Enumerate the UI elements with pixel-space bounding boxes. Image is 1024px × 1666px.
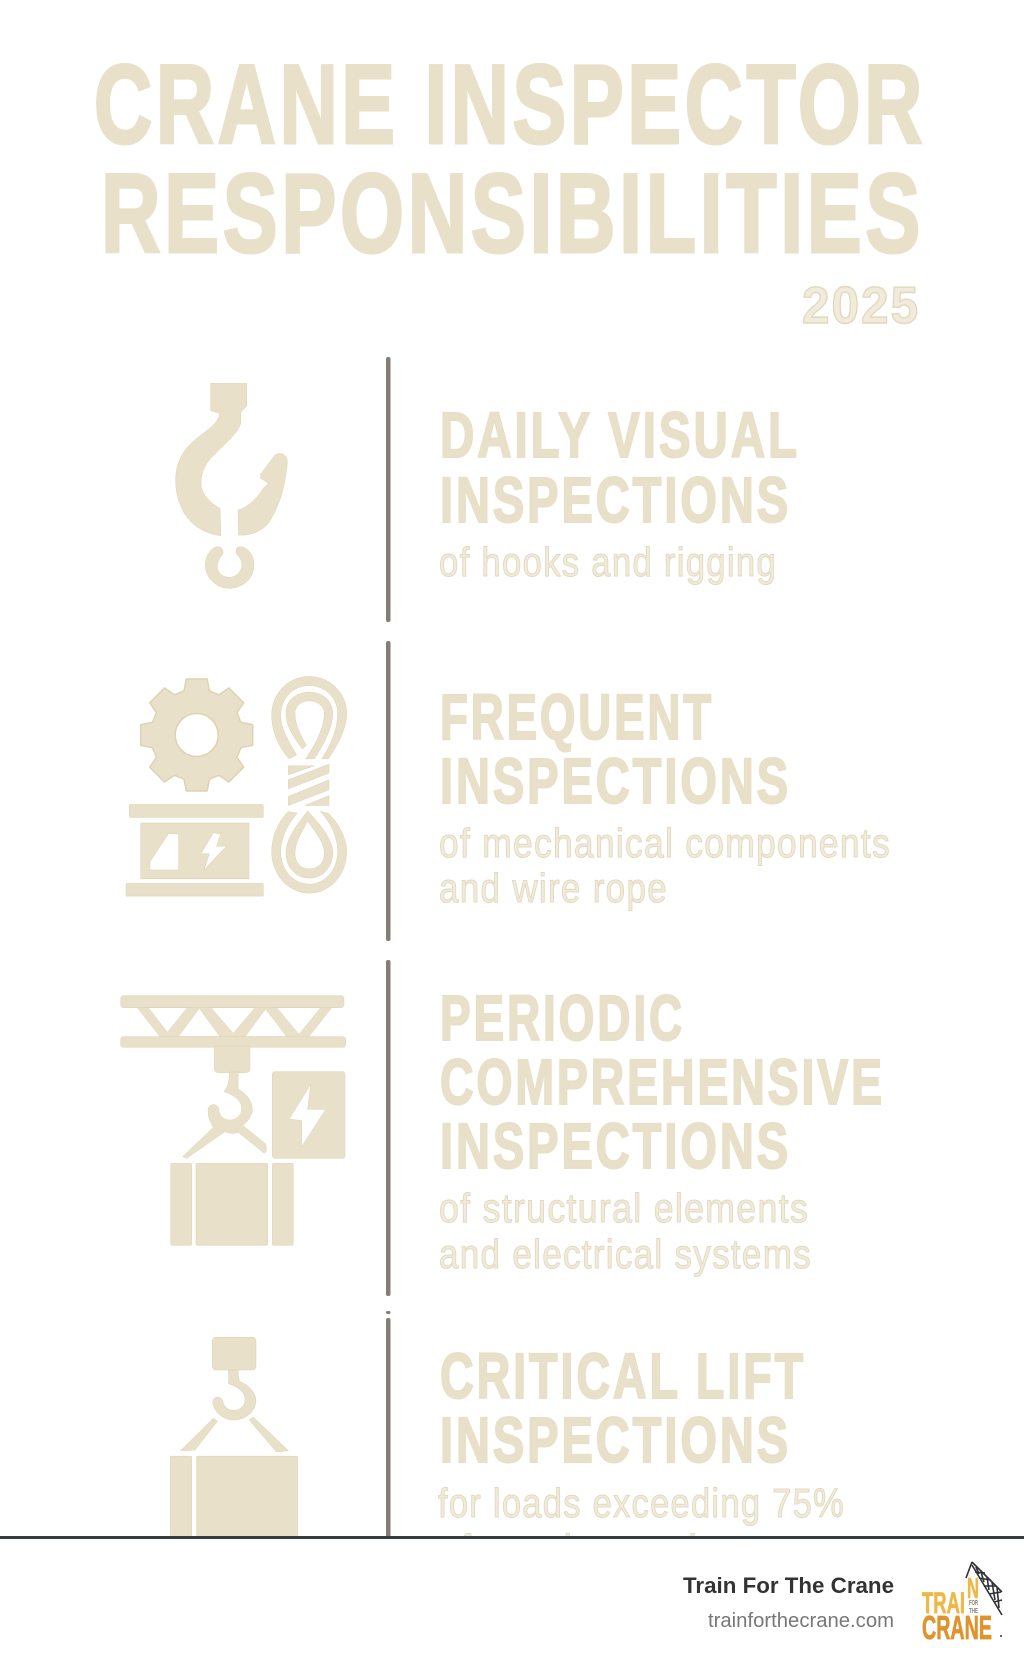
description [438, 1480, 845, 1572]
heading [440, 681, 791, 817]
icon: crane hook [176, 383, 287, 588]
logo wordmark: FOR [969, 1600, 978, 1607]
footer background [0, 1536, 1024, 1666]
divider [386, 1311, 390, 1538]
description [439, 820, 891, 911]
heading: DAILY VISUAL [440, 399, 800, 471]
year label: 2025 [802, 277, 920, 335]
divider [386, 960, 390, 1296]
logo crane boom [966, 1562, 1002, 1615]
icon: truss [121, 996, 346, 1047]
heading: INSPECTIONS [440, 745, 791, 817]
description: and electrical systems [439, 1231, 812, 1277]
heading: INSPECTIONS [440, 1404, 791, 1476]
footer [0, 1536, 1024, 1666]
icon: electrical panel [126, 805, 263, 896]
logo wordmark [922, 1573, 992, 1646]
description: for loads exceeding 75% [438, 1480, 845, 1526]
description: of structural elements [439, 1185, 809, 1231]
panel: periodic comprehensive inspections [121, 960, 885, 1296]
divider [386, 641, 390, 941]
description: of hooks and rigging [439, 539, 777, 585]
icon: wire rope [272, 676, 347, 893]
heading: CRITICAL LIFT [440, 1340, 806, 1412]
heading: INSPECTIONS [440, 1110, 791, 1182]
description [439, 1185, 812, 1277]
logo wordmark: TRAI [922, 1587, 965, 1620]
description: and wire rope [439, 865, 668, 911]
website: trainforthecrane.com [708, 1610, 894, 1632]
brand name: Train For The Crane [683, 1573, 894, 1598]
heading [440, 399, 800, 536]
icon: logo [922, 1562, 1002, 1646]
logo wordmark: N [967, 1573, 979, 1605]
description: of rated capacity [439, 1526, 729, 1572]
logo wordmark: THE [969, 1608, 978, 1615]
footer rule [0, 1536, 1024, 1539]
heading: INSPECTIONS [440, 464, 791, 536]
icon: hook, electrical box and load [171, 1046, 345, 1245]
heading [440, 1340, 806, 1476]
panel: critical lift inspections [170, 1311, 845, 1572]
description: of mechanical components [439, 820, 891, 866]
title [94, 42, 926, 276]
logo dot [1000, 1635, 1002, 1637]
panel: daily visual inspections [176, 357, 800, 622]
heading [440, 982, 885, 1182]
heading: FREQUENT [440, 681, 714, 753]
heading: PERIODIC [440, 982, 685, 1054]
icon: hook lifting a load [170, 1337, 298, 1539]
divider [386, 357, 390, 622]
panel: frequent inspections [126, 641, 891, 941]
icon: gear [141, 679, 253, 791]
